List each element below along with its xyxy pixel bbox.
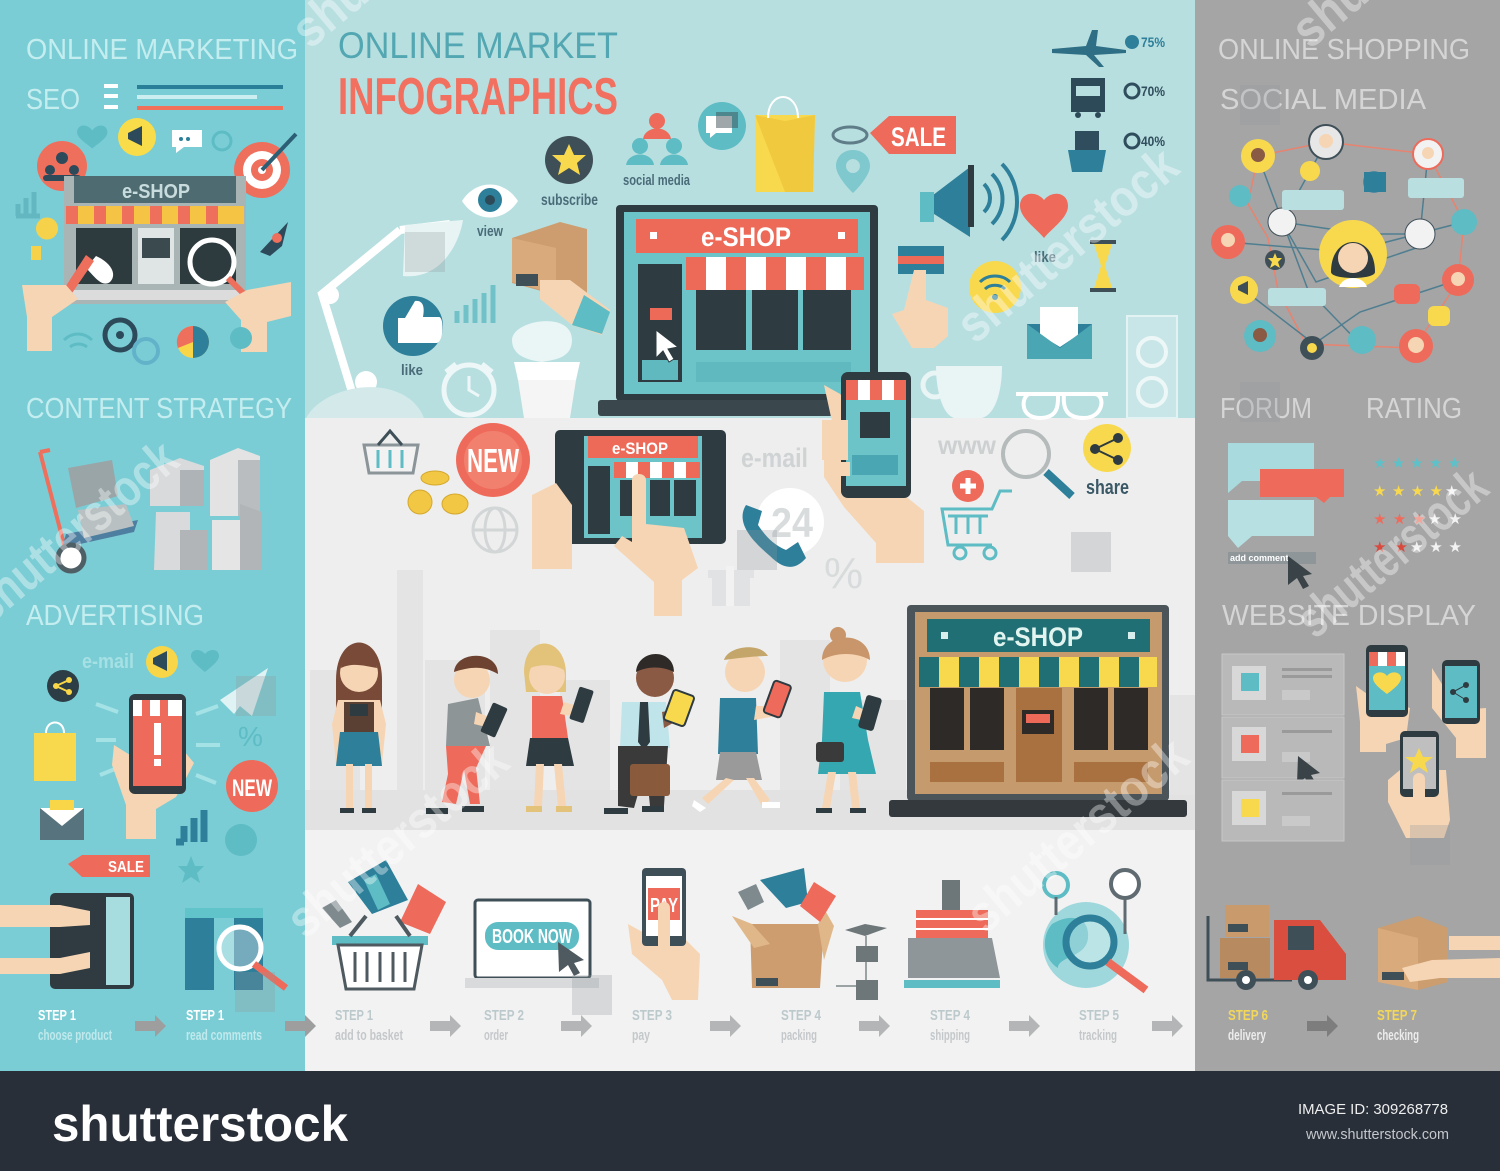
person 1 — [332, 642, 386, 813]
magnifier — [1003, 431, 1072, 496]
coffee cup and glasses — [923, 366, 1108, 418]
icon: 24h phone — [743, 488, 863, 598]
globe — [473, 508, 517, 552]
center step labels: add to basket — [335, 1027, 403, 1044]
tablet: e-shop with hands: e-SHOP — [612, 439, 668, 458]
icon: plane and transport stats: 40% — [1141, 133, 1165, 149]
speaker — [1127, 316, 1177, 418]
SEO illustration: shop with hands: e-SHOP — [122, 181, 190, 203]
icon: wifi — [969, 261, 1021, 313]
step illustrations left panel: tablet and phone — [0, 893, 286, 990]
right step labels: STEP 7 — [1377, 1007, 1417, 1024]
icon: basket — [364, 431, 418, 473]
icon: 24h phone: 24 — [771, 499, 814, 546]
center arrows — [430, 1015, 1183, 1037]
step 7 checking parcel — [1378, 916, 1500, 990]
tablet: e-shop with hands — [532, 430, 726, 616]
gift — [708, 566, 754, 606]
heading: social media: SOCIAL MEDIA — [1220, 84, 1427, 116]
icon: subscribe star: subscribe — [541, 192, 598, 209]
center step labels: tracking — [1079, 1027, 1117, 1044]
rating stars: ★★★★ — [1373, 483, 1443, 500]
advertising illustration — [34, 646, 278, 883]
step 1 icon: basket of goods — [322, 860, 446, 989]
laptop: e-shop storefront — [889, 605, 1187, 817]
icon: sale tag — [833, 116, 956, 193]
icon: heart like: like — [1034, 249, 1056, 266]
watermark logo squares — [235, 85, 1450, 1015]
center step labels: STEP 2 — [484, 1007, 524, 1024]
heading: online marketing: ONLINE MARKETING — [26, 34, 298, 66]
icon: shopping cart with plus — [942, 470, 1012, 559]
rating stars: ★★★ — [1410, 539, 1462, 556]
left panel step labels: STEP 1 — [38, 1007, 76, 1024]
icon: envelope — [1027, 307, 1092, 359]
watermark overlays: shutterstock — [275, 731, 520, 949]
left panel step labels: STEP 1 — [186, 1007, 224, 1024]
content strategy illustration: boxes and trolley — [40, 448, 262, 571]
person 3 — [524, 644, 594, 812]
laptop: e-shop: e-SHOP — [701, 222, 791, 252]
footer image id: www.shutterstock.com — [1305, 1126, 1449, 1143]
icon: sale tag: SALE — [891, 122, 946, 152]
icon: share — [1083, 424, 1131, 499]
right step labels: STEP 6 — [1228, 1007, 1268, 1024]
heading: online shopping: ONLINE SHOPPING — [1218, 34, 1470, 66]
step 6 delivery truck — [1208, 905, 1346, 990]
website cards — [1222, 654, 1344, 841]
center step labels: packing — [781, 1027, 817, 1044]
center step labels: shipping — [930, 1027, 970, 1044]
rating stars: ★★★★★ — [1373, 455, 1461, 472]
plant pot — [512, 321, 580, 418]
right step labels — [1228, 1007, 1419, 1044]
SEO bars — [104, 84, 283, 110]
social network diagram — [1211, 125, 1477, 363]
rating stars: ★ — [1445, 483, 1458, 500]
step 3 icon: phone pay: PAY — [650, 895, 678, 917]
title: INFOGRAPHICS — [338, 68, 618, 126]
advertising illustration: e-mail — [82, 651, 134, 673]
icon: eye view: view — [477, 223, 503, 240]
left panel step labels — [38, 1007, 262, 1044]
center step labels: pay — [632, 1027, 650, 1044]
center step labels: STEP 4 — [781, 1007, 822, 1024]
icon: thumbs up like — [383, 296, 443, 379]
rating stars: ★★ — [1428, 511, 1462, 528]
step 5 icon: globe tracking — [1043, 870, 1146, 990]
icon: social media people: social media — [623, 172, 690, 189]
icon: thumbs up like: like — [401, 362, 423, 379]
right step labels: delivery — [1228, 1027, 1266, 1044]
center step labels: STEP 3 — [632, 1007, 672, 1024]
icon: plane and transport stats: 75% — [1141, 34, 1165, 50]
forum comment bubbles — [1228, 443, 1344, 589]
left panel step labels: choose product — [38, 1027, 112, 1044]
person 2 — [426, 656, 508, 814]
left panel step labels: read comments — [186, 1027, 262, 1044]
advertising illustration: % — [238, 721, 263, 752]
footer image id: IMAGE ID: 309268778 — [1298, 1101, 1448, 1118]
icon: eye view — [462, 184, 518, 240]
footer image id — [1298, 1101, 1449, 1143]
step 4 icon: open parcel — [732, 868, 887, 1000]
alarm clock — [444, 364, 494, 415]
center step labels: STEP 4 — [930, 1007, 971, 1024]
icon: plane and transport stats: 70% — [1141, 83, 1165, 99]
advertising illustration: SALE — [108, 859, 144, 876]
center step labels — [335, 1007, 1119, 1044]
megaphone — [920, 164, 1017, 240]
center step labels: STEP 5 — [1079, 1007, 1119, 1024]
rating stars — [1373, 455, 1462, 556]
heading: content strategy: CONTENT STRATEGY — [26, 393, 292, 425]
laptop: e-shop — [598, 205, 902, 416]
icon: share: share — [1086, 477, 1129, 499]
icon: chat bubble — [698, 102, 746, 150]
person 5 — [692, 647, 792, 812]
center step labels: order — [484, 1027, 508, 1044]
forum comment bubbles: add comment — [1230, 553, 1289, 563]
phone in hand — [822, 372, 924, 563]
arrows left panel — [135, 1015, 316, 1037]
rating stars: ★★ — [1373, 539, 1408, 556]
icon: parcel in hand — [512, 222, 610, 335]
heading: website display: WEBSITE DISPLAY — [1222, 600, 1476, 632]
title: ONLINE MARKET — [338, 25, 618, 66]
step 3 icon: phone pay — [628, 868, 700, 1000]
right arrow — [1307, 1015, 1338, 1037]
icon: heart like — [1020, 194, 1068, 266]
SEO illustration: shop with hands — [16, 118, 296, 363]
watermark overlays: shutterstock — [955, 726, 1200, 944]
step 2 icon: laptop book now — [465, 900, 599, 988]
icon: plane and transport stats — [1052, 30, 1165, 172]
step 2 icon: laptop book now: BOOK NOW — [492, 926, 572, 948]
icon: credit card and hand — [892, 246, 948, 348]
text: www: www — [937, 432, 997, 460]
small bar chart — [457, 285, 493, 323]
laptop: e-shop storefront: e-SHOP — [993, 622, 1083, 652]
text: e-mail: e-mail — [741, 443, 808, 473]
rating stars: ★★★ — [1373, 511, 1426, 528]
step 4 icon: cargo ship — [904, 880, 1000, 988]
heading: SEO: SEO — [26, 84, 80, 116]
footer logo: shutterstock — [52, 1096, 348, 1152]
center step labels: STEP 1 — [335, 1007, 373, 1024]
person 4 — [604, 654, 695, 814]
city skyline background — [310, 570, 1195, 795]
icon: subscribe star — [541, 136, 598, 209]
watermark overlays: shutterstock — [945, 136, 1190, 354]
title — [338, 25, 618, 126]
NEW badge — [456, 423, 530, 497]
lamp parts — [306, 220, 463, 418]
icon: shopping bag — [755, 97, 815, 192]
advertising illustration: NEW — [232, 775, 272, 802]
heading: rating: RATING — [1366, 393, 1462, 425]
heading: advertising: ADVERTISING — [26, 600, 204, 632]
heading: forum: FORUM — [1220, 393, 1312, 425]
desk lamp — [322, 224, 450, 392]
right step labels: checking — [1377, 1027, 1419, 1044]
gold coins — [408, 471, 468, 514]
icon: hourglass — [1090, 240, 1116, 292]
phones in hands — [1356, 645, 1486, 838]
icon: social media people — [623, 113, 690, 189]
person 6 — [816, 627, 882, 813]
icon: 24h phone: % — [824, 549, 863, 598]
NEW badge: NEW — [467, 442, 520, 479]
